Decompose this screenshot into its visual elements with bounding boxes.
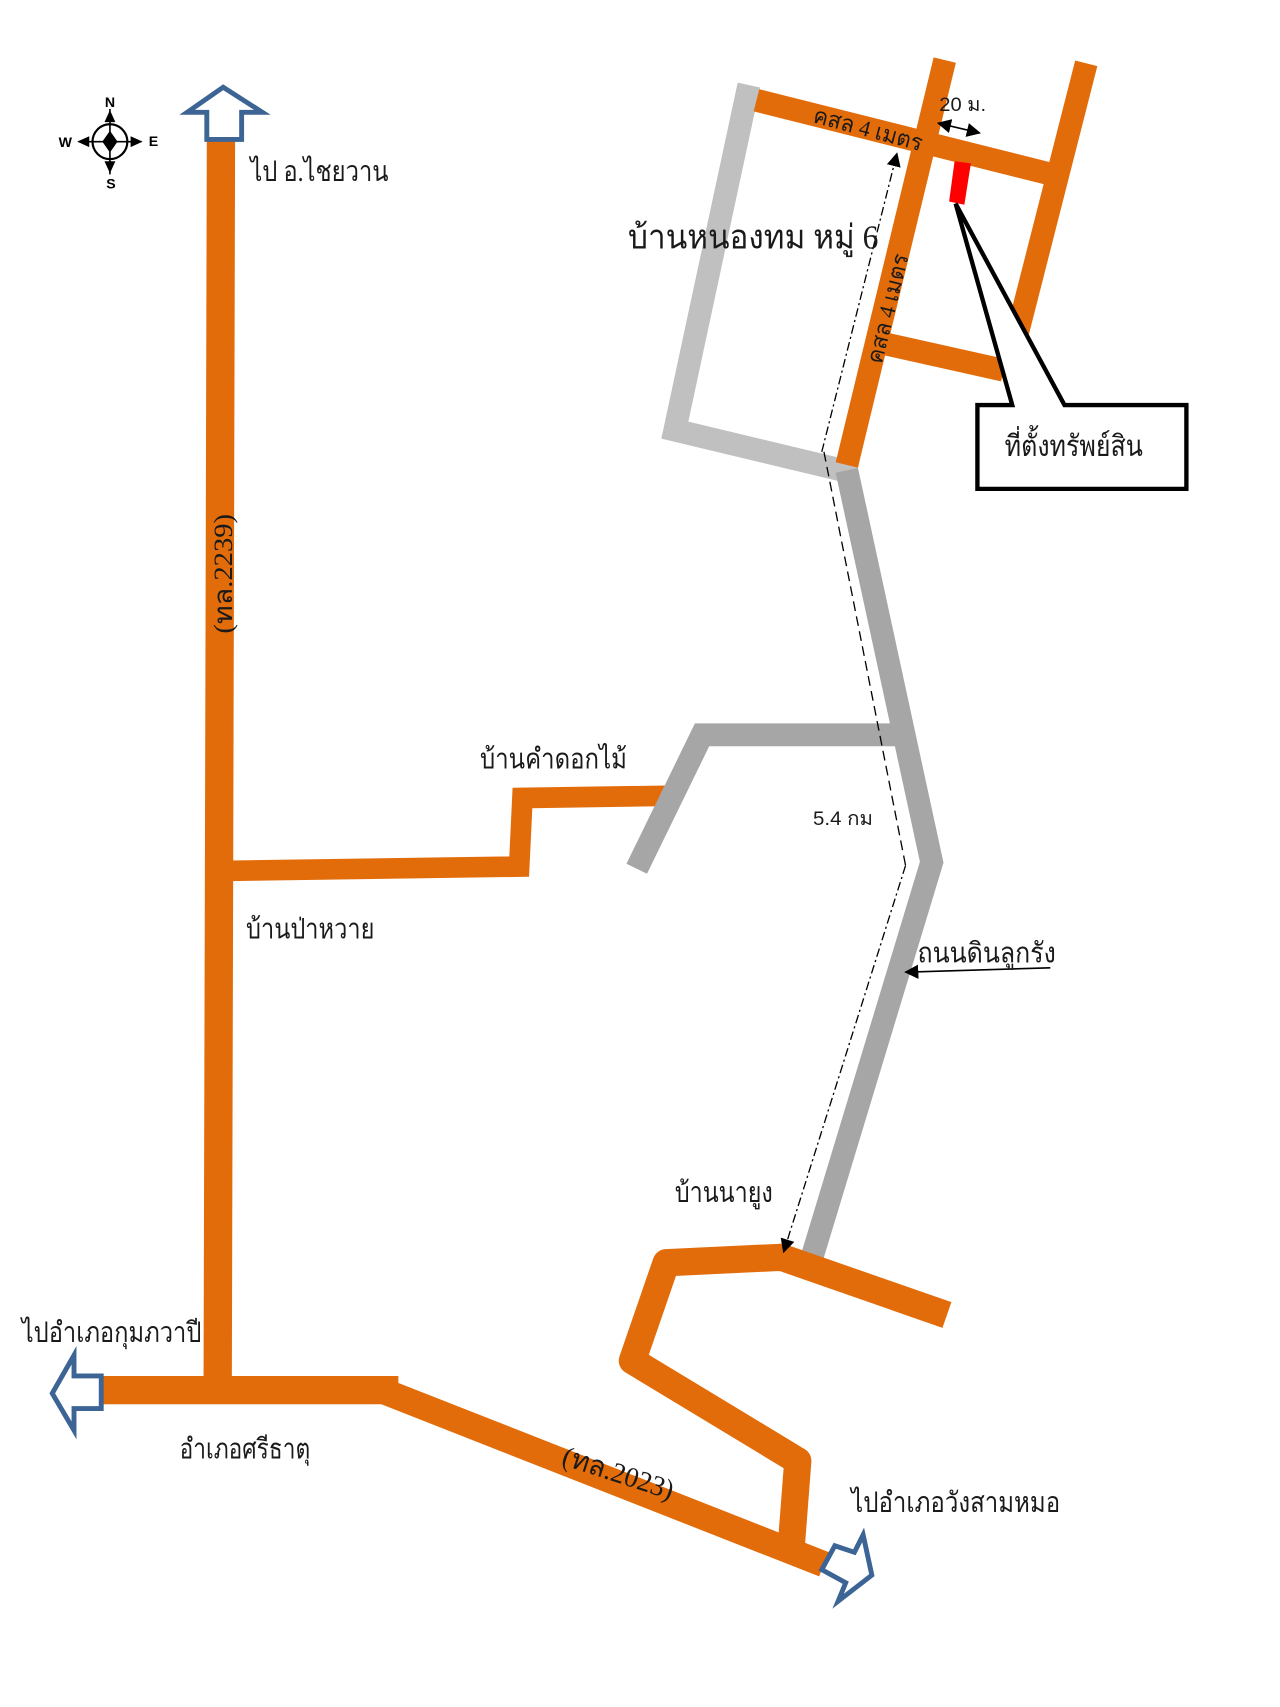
distance line dash-dot upper bbox=[822, 154, 897, 452]
road: village top orange road bbox=[756, 60, 1086, 465]
label: Ban Na Yung: บ้านนายูง bbox=[675, 1178, 773, 1210]
arrow: laterite road pointer bbox=[906, 968, 1050, 972]
distance line dashed bbox=[824, 452, 906, 865]
distance line dash-dot lower bbox=[784, 865, 906, 1252]
road: bottom highway bbox=[101, 1377, 398, 1403]
compass: S bbox=[106, 175, 116, 191]
road: main highway 2239 bbox=[218, 139, 221, 1382]
callout: ที่ตั้งทรัพย์สิน bbox=[1005, 425, 1143, 463]
arrow: north destination bbox=[187, 87, 262, 139]
property marker bbox=[949, 161, 971, 205]
callout bbox=[956, 204, 1186, 489]
label: village name: บ้านหนองทม หมู่ 6 bbox=[628, 219, 878, 257]
road: gray laterite road bbox=[812, 470, 932, 1257]
label: Ban Pa Wai: บ้านป่าหวาย bbox=[246, 914, 374, 945]
road: Ban Na Yung loop bbox=[632, 1257, 947, 1546]
road: highway 2023 bbox=[381, 1390, 824, 1564]
road: Ban Pa Wai branch bbox=[223, 796, 666, 871]
arrow: west destination bbox=[52, 1355, 101, 1430]
label: to Wang Sam Mo: ไปอำเภอวังสามหมอ bbox=[849, 1486, 1060, 1519]
label: distance: 5.4 กม bbox=[813, 808, 873, 830]
label: Si That: อำเภอศรีธาตุ bbox=[180, 1434, 310, 1467]
compass: E bbox=[149, 133, 158, 149]
compass: N bbox=[105, 94, 115, 110]
label: to Chai Wan: ไป อ.ไชยวาน bbox=[249, 155, 389, 188]
label: highway 2023: (ทล.2023) bbox=[558, 1441, 678, 1506]
label: laterite road: ถนนดินลูกรัง bbox=[918, 938, 1056, 970]
arrow: 20 m width bbox=[938, 123, 980, 133]
label: 20 m: 20 ม. bbox=[939, 94, 986, 116]
arrow: south-east destination bbox=[822, 1535, 872, 1601]
label: Ban Kham Dok Mai: บ้านคำดอกไม้ bbox=[480, 743, 627, 776]
label: to Kumphawapi: ไปอำเภอกุมภวาปี bbox=[20, 1316, 201, 1350]
road: gray branch bbox=[637, 735, 909, 869]
compass bbox=[59, 94, 158, 191]
label: concrete road horizontal: คสล 4 เมตร bbox=[811, 103, 925, 156]
label: highway 2239: (ทล.2239) bbox=[209, 514, 238, 634]
label: concrete road vertical: คสล 4 เมตร bbox=[862, 251, 914, 366]
compass: W bbox=[59, 134, 73, 150]
road: light gray village loop bbox=[675, 85, 857, 474]
